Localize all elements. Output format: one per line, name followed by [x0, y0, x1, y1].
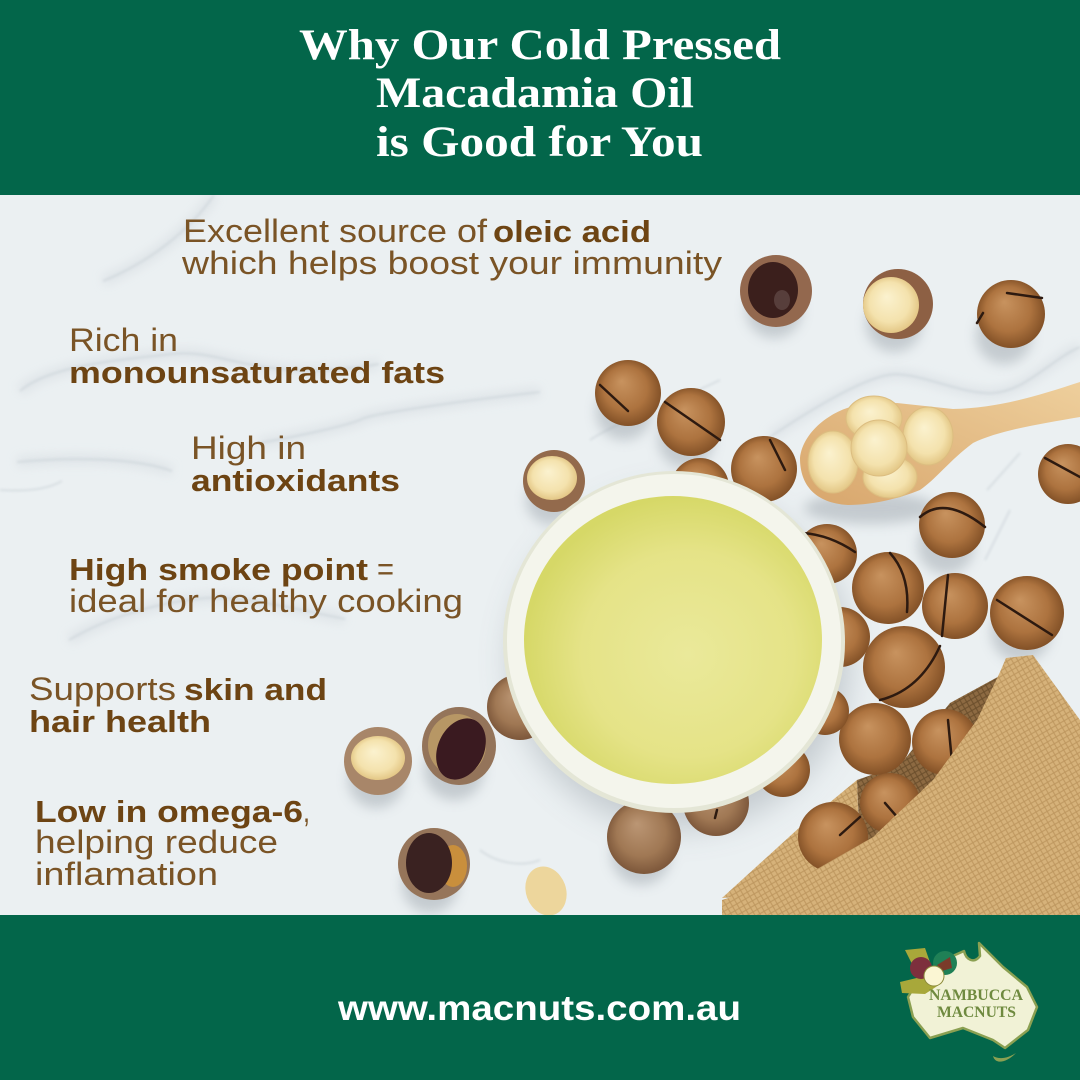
text: smoke point: High smoke point [69, 552, 368, 587]
logo: Nambucca Macnuts [900, 943, 1037, 1062]
logo: Nambucca Macnuts: MACNUTS [937, 1004, 1016, 1021]
text: skin and hair: Supports [29, 671, 176, 707]
title: Macadamia Oil [376, 70, 694, 117]
website url: www.macnuts.com.au [337, 989, 741, 1028]
nut shell cracks [600, 293, 1080, 835]
text: smoke point [69, 551, 463, 619]
title [299, 22, 781, 166]
text: oleic acid: Excellent source of [183, 213, 487, 249]
text: antioxidants: High in [191, 430, 306, 466]
icon: shells holding kernels [344, 269, 933, 921]
text: omega-6: Low in omega-6 [35, 794, 303, 829]
icon: whole macadamia nuts [595, 280, 1080, 872]
soft shadows under objects [348, 282, 1051, 913]
text: skin and hair [29, 671, 327, 739]
icon: opened shells with dark interior [398, 255, 812, 900]
text: monounsaturated fats: monounsaturated fats [69, 355, 445, 390]
text: omega-6 [35, 793, 310, 892]
text: antioxidants [191, 430, 400, 498]
text: monounsaturated fats [69, 322, 445, 390]
text: oleic acid: which helps boost your immunity [181, 245, 722, 281]
icon: muted nuts beside bowl [487, 674, 749, 874]
text: smoke point: = [377, 551, 394, 587]
text: antioxidants: antioxidants [191, 463, 400, 498]
text: smoke point: ideal for healthy cooking [69, 583, 463, 619]
text: omega-6: helping reduce [35, 824, 278, 860]
text: omega-6: inflamation [35, 856, 218, 892]
text: oleic acid [181, 213, 722, 281]
title: Why Our Cold Pressed [299, 22, 781, 69]
icon: burlap sack back flap [722, 673, 1007, 898]
icon: wooden spoon [800, 382, 1080, 505]
icon: burlap sack front flap [722, 655, 1080, 915]
icon: macadamia kernels on spoon [808, 396, 953, 498]
text: skin and hair: skin and [184, 672, 327, 707]
text: monounsaturated fats: Rich in [69, 322, 178, 358]
top banner [0, 0, 1080, 195]
text: oleic acid: oleic acid [493, 214, 651, 249]
title: is Good for You [376, 119, 703, 166]
panel: marble photo background [0, 195, 1080, 915]
icon: bowl of macadamia oil [503, 471, 845, 813]
bottom banner [0, 915, 1080, 1080]
text: omega-6: , [303, 793, 310, 829]
text: skin and hair: hair health [29, 704, 211, 739]
logo: Nambucca Macnuts: NAMBUCCA [929, 987, 1024, 1004]
